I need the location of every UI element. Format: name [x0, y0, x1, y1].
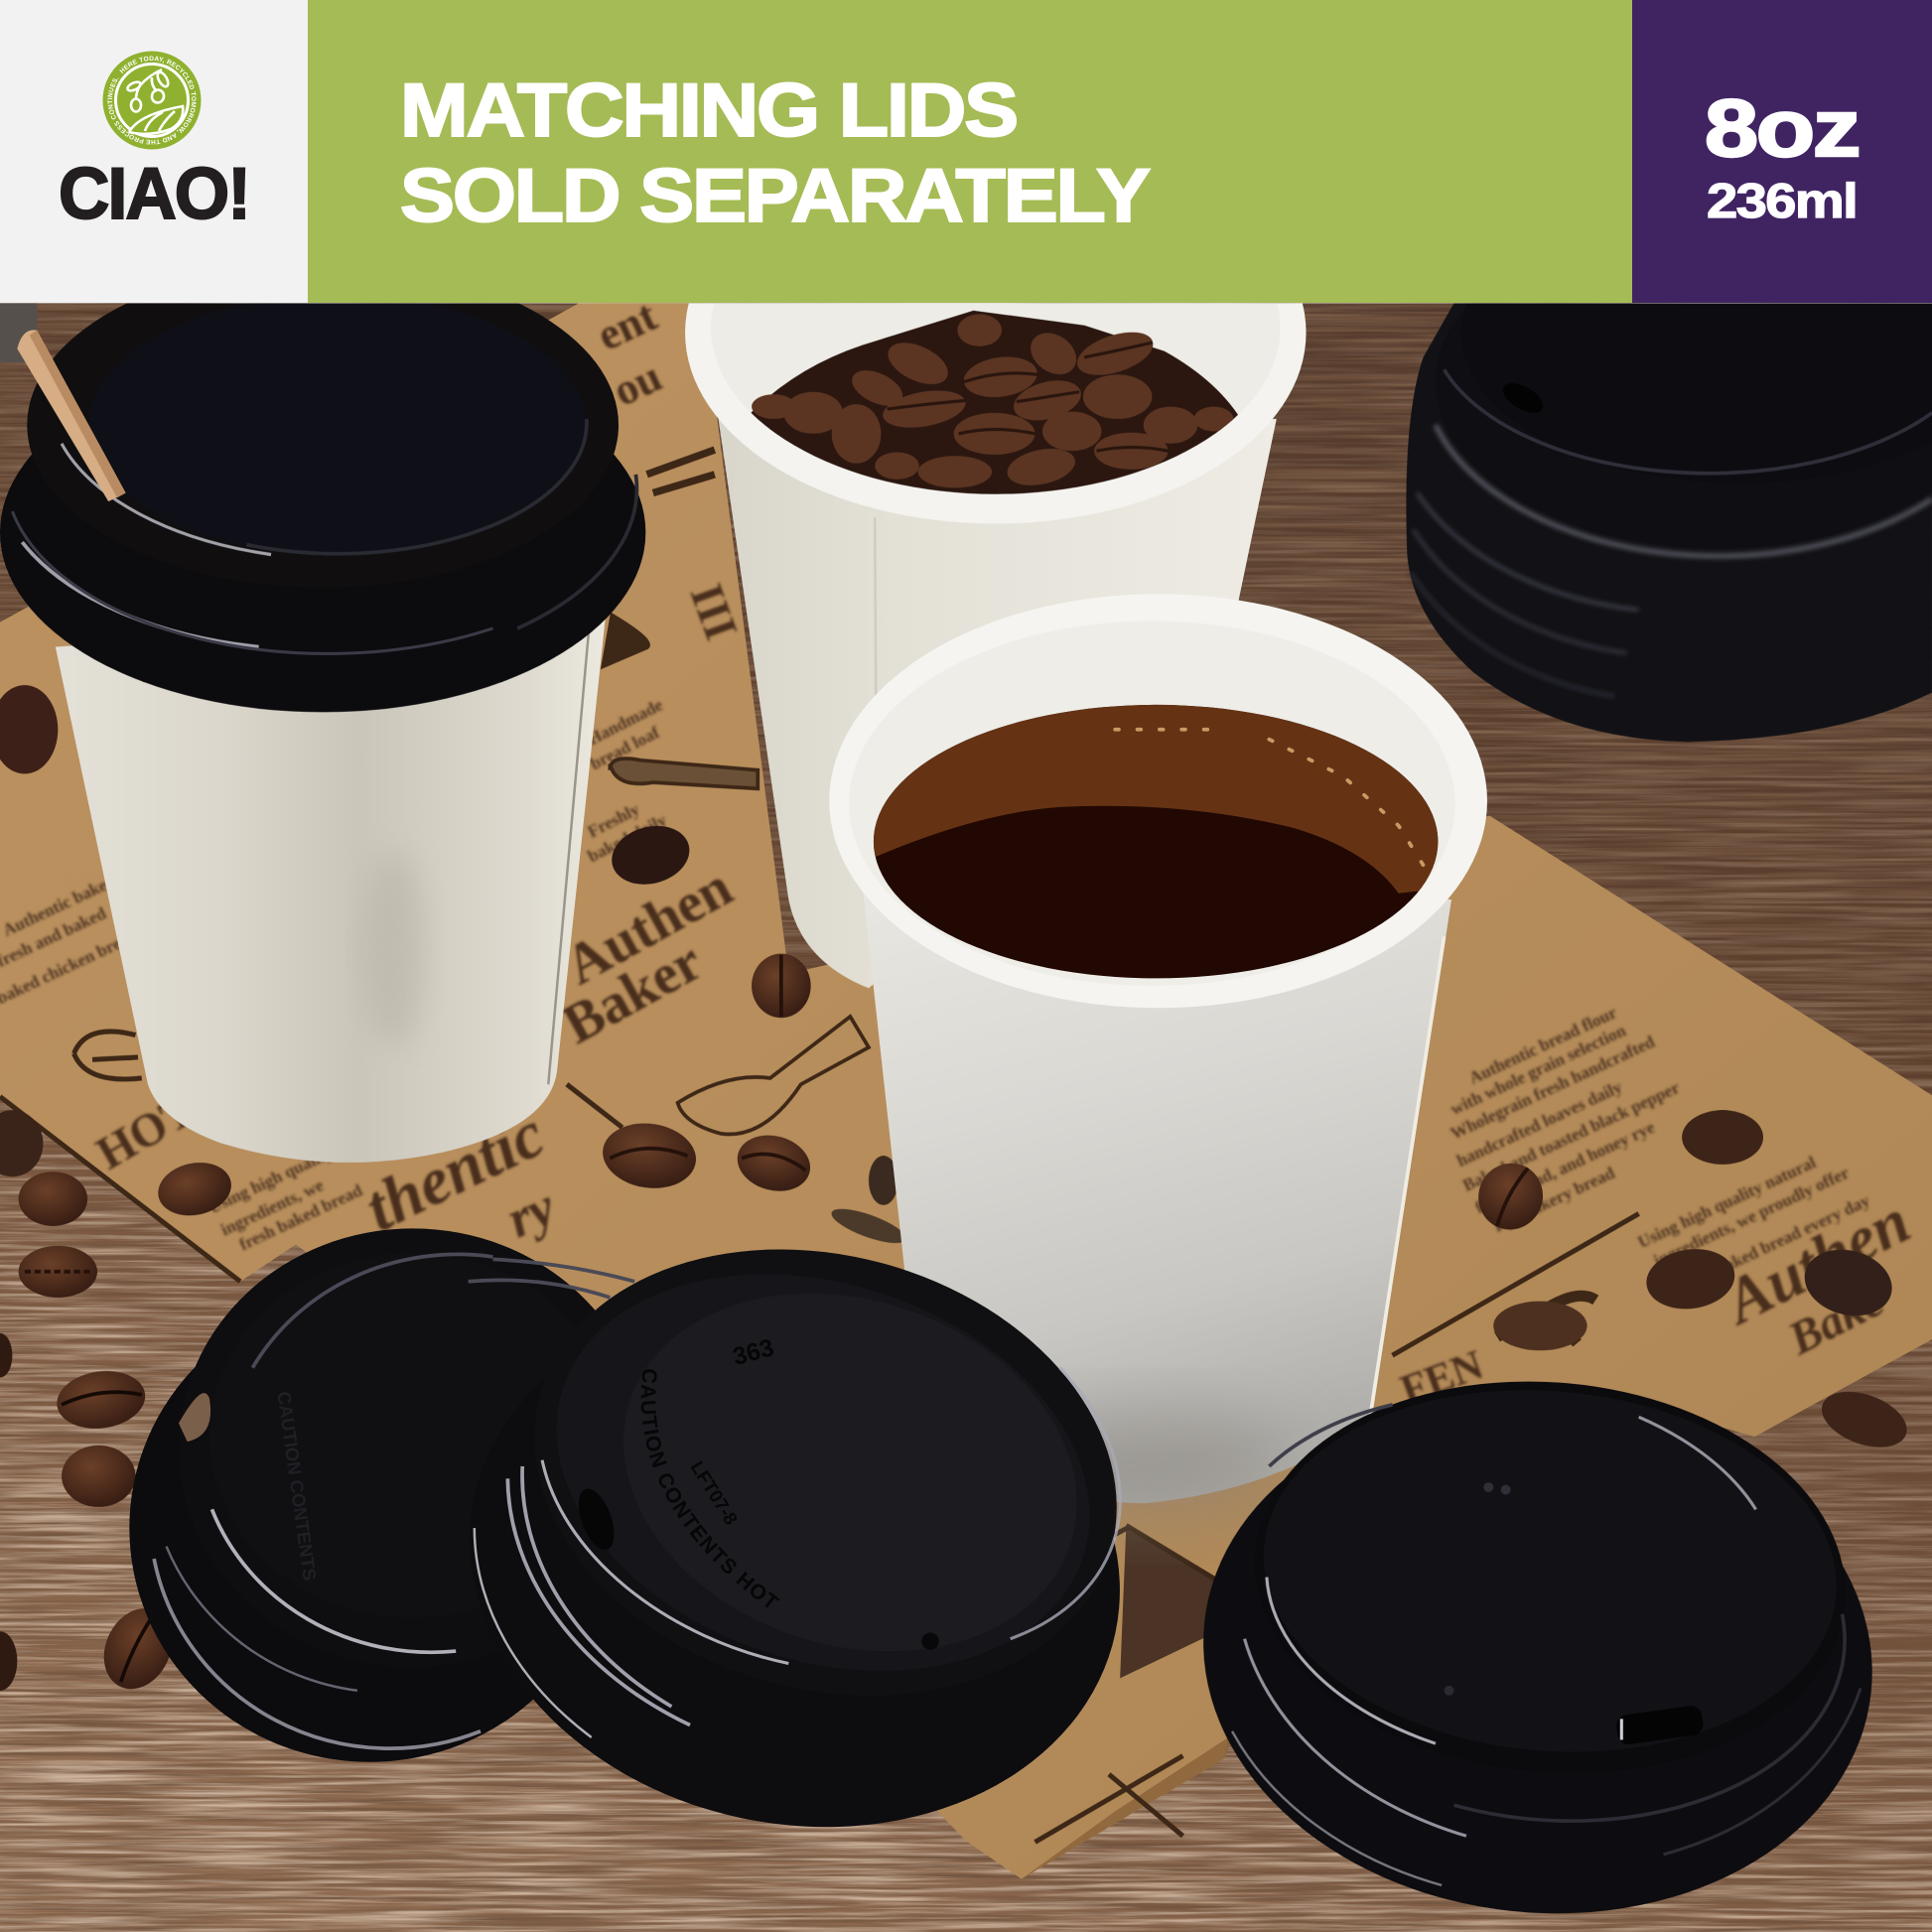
black lid	[0, 262, 645, 712]
newspaper lettering: Using high quality natural	[1635, 1153, 1819, 1252]
title	[400, 69, 1150, 238]
newspaper lettering: ou	[606, 350, 669, 416]
scattered coffee beans	[0, 685, 1914, 1700]
header panel: logo background	[0, 0, 308, 303]
olive branch mark	[126, 69, 183, 134]
back paper cup filled with coffee beans	[685, 304, 1307, 989]
newspaper lettering: bread loaf	[587, 723, 662, 773]
newspaper lettering: Handmade	[585, 695, 666, 749]
logo badge	[103, 52, 201, 149]
size: ounces: 8oz	[1705, 83, 1859, 174]
newspaper lettering: handcrafted loaves daily	[1453, 1077, 1625, 1171]
black lid: centre, face up with embossed text: LFT07-8	[687, 1457, 742, 1529]
newspaper lettering: fresh blend, and honey rye	[1472, 1118, 1658, 1217]
coffee beans in cup	[751, 310, 1238, 494]
left paper cup with black lid	[0, 262, 645, 1163]
newspaper lettering: with whole grain selection	[1448, 1021, 1629, 1119]
newspaper lettering: baked daily	[585, 810, 670, 866]
newspaper lettering: fresh baked bread	[236, 1180, 365, 1254]
newspaper lettering: baked bread every day	[1713, 1190, 1872, 1279]
header panel: purple size block	[1632, 0, 1932, 303]
stack of black lids, top right	[1406, 183, 1932, 742]
badge ring text: HERE TODAY, RECYCLED TOMORROW, AND THE PROCESS CONTINUES.	[107, 56, 197, 145]
vent hole	[179, 1393, 210, 1442]
black lid: front right, vent slot	[1177, 1357, 1897, 1932]
newspaper lettering: Rye bakery bread	[1491, 1164, 1618, 1236]
newspaper lettering: Wholegrain fresh handcrafted	[1448, 1032, 1658, 1144]
brand wordmark: CIAO!	[59, 154, 249, 234]
newspaper lettering: HOT	[88, 1083, 204, 1180]
newspaper lettering: Bake	[1780, 1274, 1892, 1365]
newspaper lettering: FEN	[1395, 1341, 1489, 1414]
newspaper lettering: Authen	[1711, 1184, 1921, 1338]
newspaper lettering: Authen	[555, 855, 743, 997]
newspaper lettering: Authentic bakers	[0, 870, 123, 940]
black lid: centre, face up with embossed text	[473, 1249, 1122, 1827]
newspaper lettering: ry	[497, 1175, 564, 1249]
size: millilitres: 236ml	[1707, 175, 1857, 228]
newspaper illustrations	[0, 450, 1639, 1842]
black lid: centre, face up with embossed text: 363	[731, 1334, 776, 1371]
newspaper lettering: Using high quality	[206, 1143, 337, 1217]
newspaper lettering: ent	[590, 290, 664, 360]
embossed lid text: CAUTION CONTENTS HOT	[641, 1369, 780, 1608]
title: MATCHING LIDS	[400, 69, 1017, 153]
black lid: back left, lying on table	[129, 1228, 647, 1762]
newspaper lettering: Baker	[553, 929, 712, 1056]
newspaper lettering: ingredients, we proudly offer	[1651, 1164, 1853, 1270]
title: SOLD SEPARATELY	[400, 154, 1150, 238]
newspaper lettering: ingredients, we	[218, 1175, 327, 1239]
newspaper lettering: Baked and toasted black pepper	[1460, 1078, 1683, 1195]
coffee surface	[863, 690, 1453, 978]
newspaper lettering: thentic	[353, 1097, 555, 1246]
wooden stir stick	[17, 330, 126, 501]
newspaper lettering: Authentic bread flour	[1466, 1003, 1620, 1088]
paper rim	[829, 594, 1487, 1008]
front paper cup with coffee	[829, 594, 1487, 1516]
newspaper lettering: Freshly	[585, 799, 642, 842]
embossed lid text: CAUTION CONTENTS	[273, 1390, 321, 1582]
header panel: green title band	[308, 0, 1632, 303]
newspaper lettering: III	[680, 578, 747, 646]
newspaper lettering	[0, 290, 1921, 1414]
